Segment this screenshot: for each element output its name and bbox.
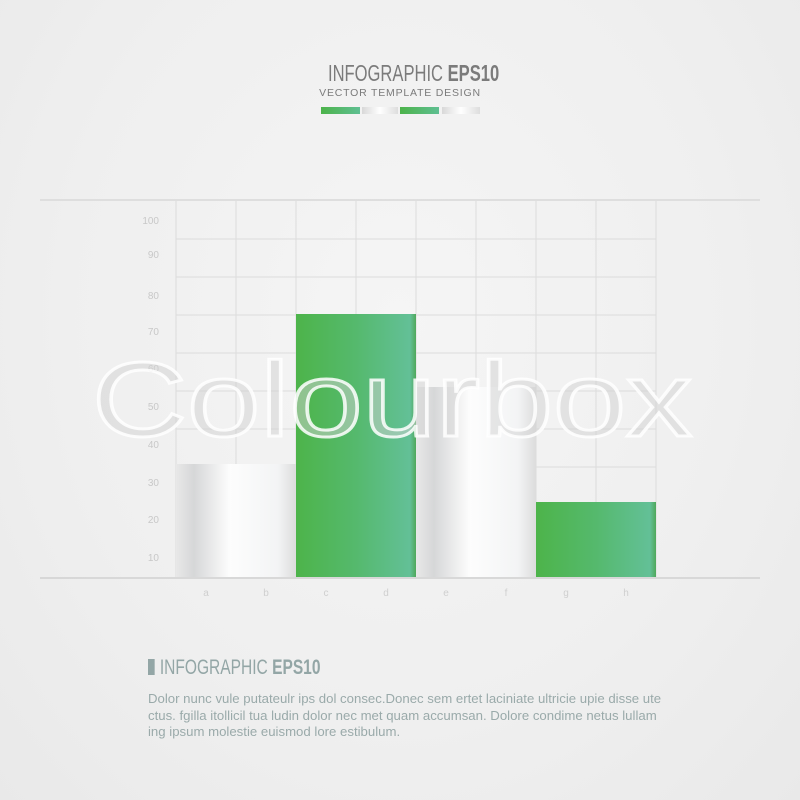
watermark: Colourbox <box>92 341 692 459</box>
y axis labels: 80 <box>148 291 159 302</box>
y axis labels: 60 <box>148 364 159 375</box>
y axis labels: 90 <box>148 250 159 261</box>
bar g-h <box>536 502 656 577</box>
x axis labels: a <box>203 588 209 599</box>
y axis labels: 10 <box>148 553 159 564</box>
bottom text block <box>148 656 661 739</box>
x axis labels: c <box>324 588 328 599</box>
bar a-b <box>176 464 296 577</box>
y axis labels: 70 <box>148 327 159 338</box>
x axis labels: b <box>263 588 269 599</box>
paragraph: Dolor nunc vule putateulr ips dol consec.Donec sem ertet laciniate ultricie upie disse ute <box>148 691 661 706</box>
bar e-f <box>416 387 536 577</box>
bottom heading: INFOGRAPHIC EPS10 <box>160 656 320 679</box>
header <box>319 60 499 114</box>
x axis labels: e <box>443 588 449 599</box>
y axis labels: 50 <box>148 402 159 413</box>
y axis labels: 100 <box>142 216 159 227</box>
y axis labels: 30 <box>148 478 159 489</box>
y axis labels: 40 <box>148 440 159 451</box>
y axis labels: 20 <box>148 515 159 526</box>
paragraph <box>148 691 661 739</box>
bar c-d <box>296 314 416 577</box>
x axis labels <box>203 588 629 599</box>
subtitle: VECTOR TEMPLATE DESIGN <box>319 87 481 99</box>
paragraph: ctus. fgilla itollicil tua ludin dolor nec met quam accumsan. Dolore condime netus lullam <box>148 708 657 722</box>
y axis labels <box>142 216 159 564</box>
x axis labels: g <box>563 588 569 599</box>
color legend strips <box>321 107 480 114</box>
x axis labels: d <box>383 588 389 599</box>
x axis labels: f <box>505 588 508 599</box>
title: INFOGRAPHIC EPS10 <box>328 60 499 86</box>
paragraph: ing ipsum molestie euismod lore estibulum. <box>148 724 400 739</box>
x axis labels: h <box>623 588 629 599</box>
